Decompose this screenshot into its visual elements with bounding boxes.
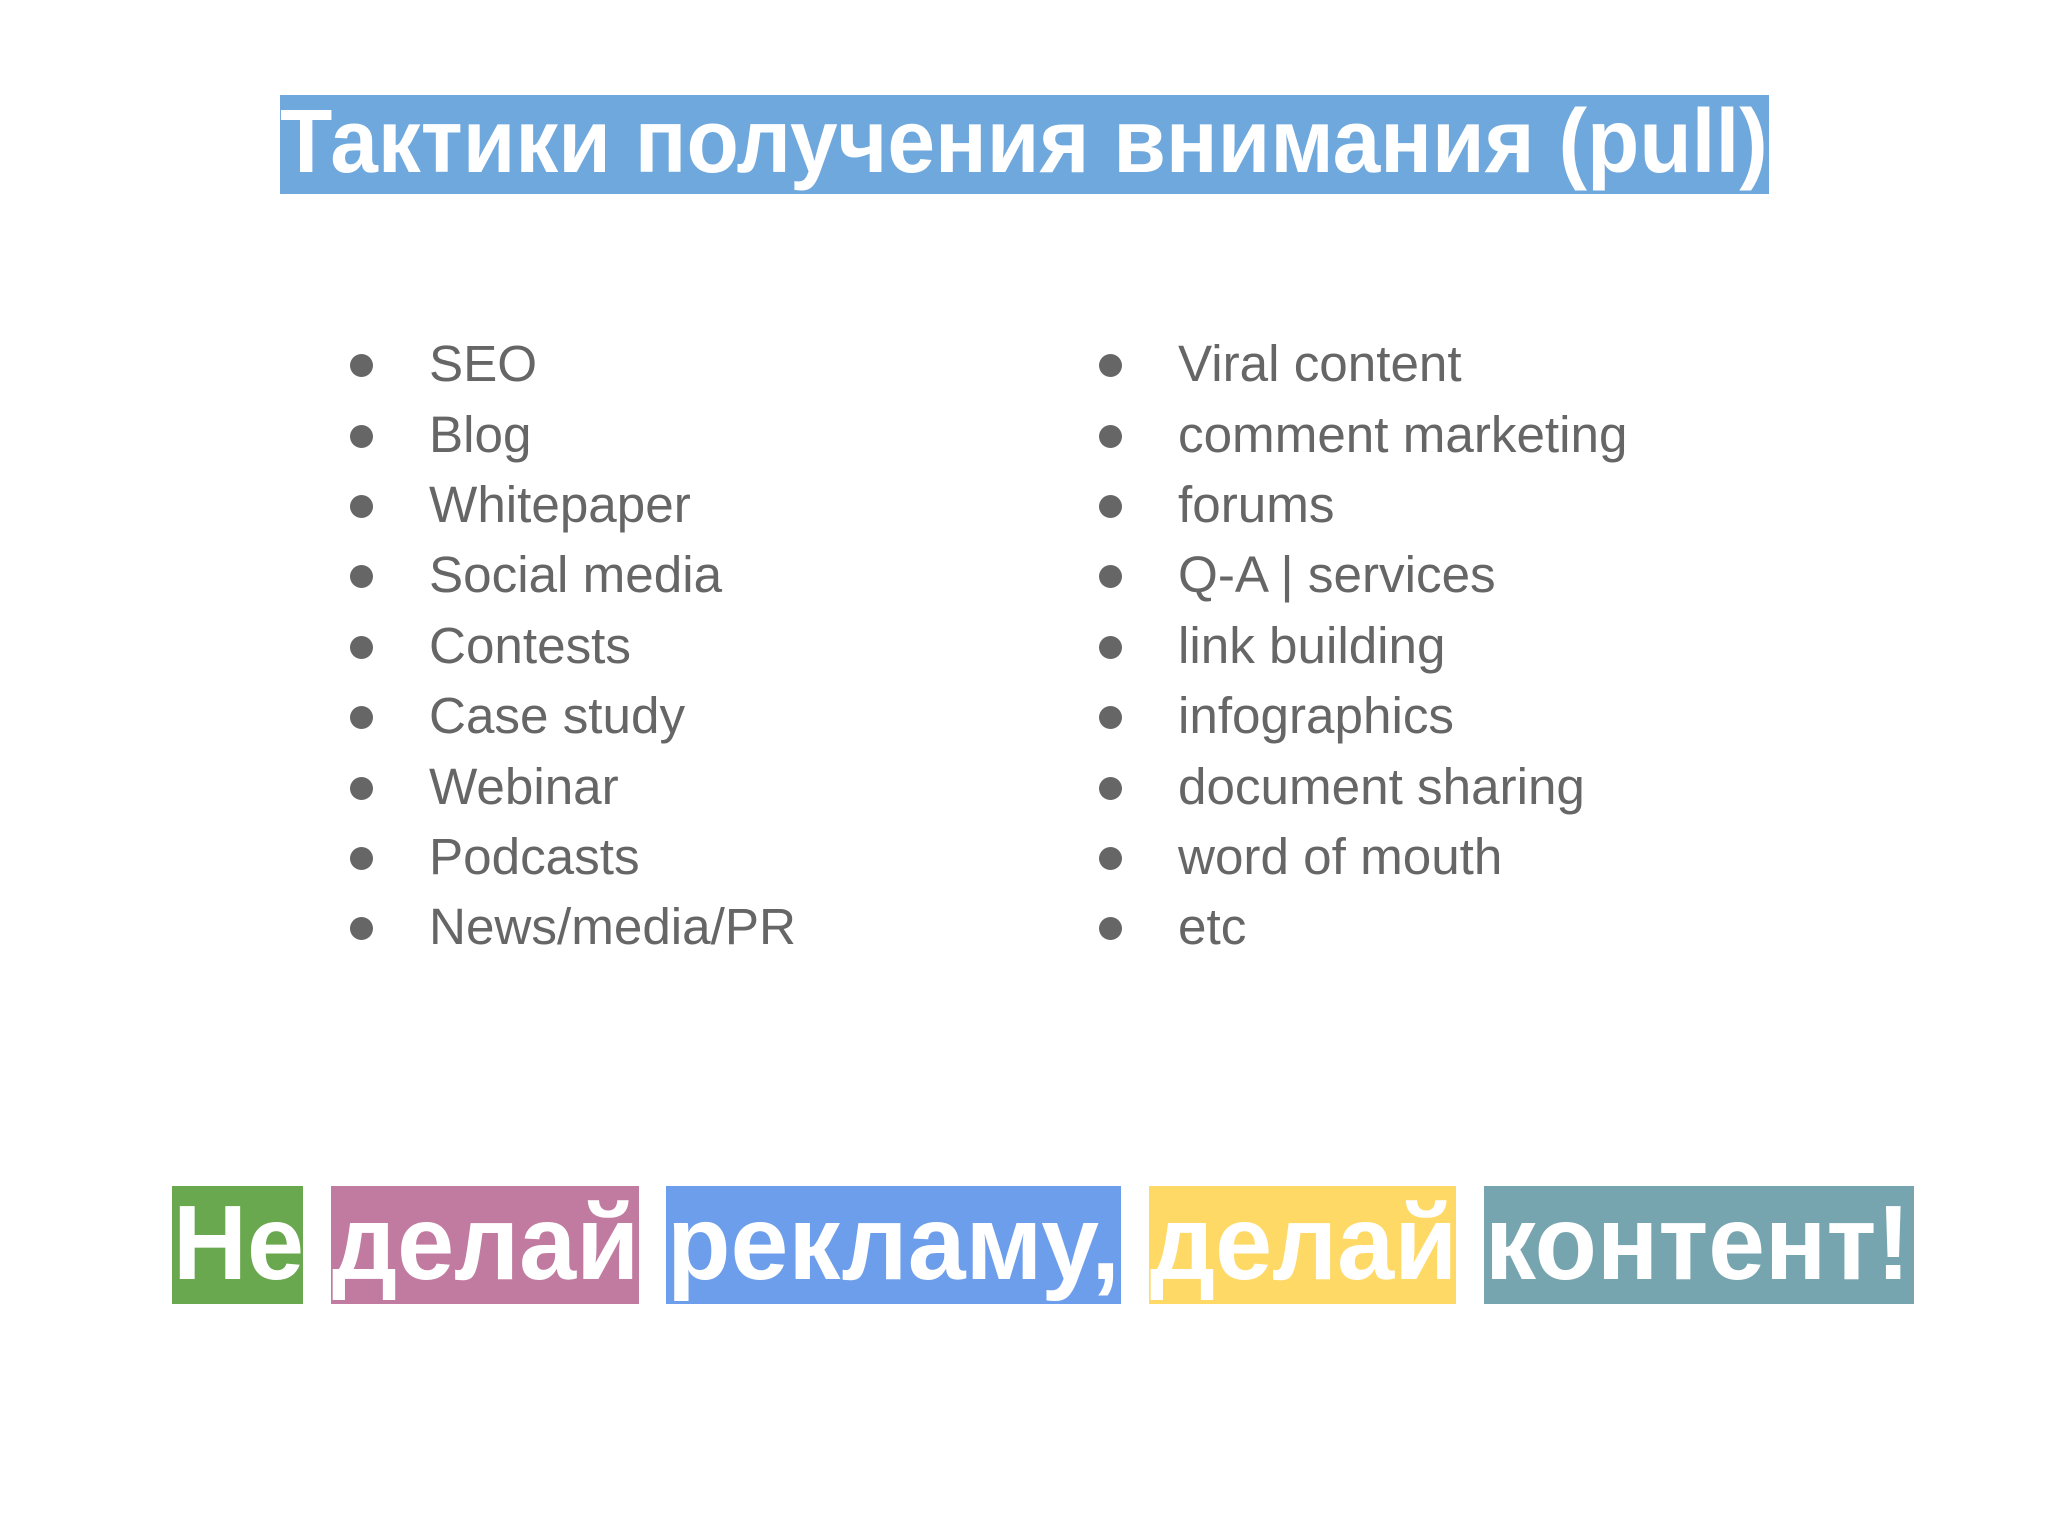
panel: right bullet list: word of mouth bbox=[1178, 828, 1502, 885]
panel: right bullet list: Q-A | services bbox=[1178, 546, 1496, 603]
panel: left bullet list bbox=[350, 335, 796, 955]
panel: left bullet list: Podcasts bbox=[429, 828, 640, 885]
panel: right bullet list: etc bbox=[1178, 898, 1246, 955]
panel: left bullet list: Case study bbox=[429, 687, 685, 744]
panel: left bullet list: Whitepaper bbox=[429, 476, 691, 533]
panel: right bullet list: link building bbox=[1178, 617, 1446, 674]
panel: left bullet list: Contests bbox=[429, 617, 631, 674]
panel: left bullet list: Social media bbox=[429, 546, 722, 603]
slogan word: рекламу: рекламу, bbox=[667, 1184, 1120, 1302]
panel: right bullet list: comment marketing bbox=[1178, 406, 1627, 463]
panel: right bullet list: infographics bbox=[1178, 687, 1454, 744]
panel: right bullet list: forums bbox=[1178, 476, 1334, 533]
slogan word: контент: контент! bbox=[1485, 1184, 1910, 1302]
panel: right bullet list bbox=[1099, 335, 1627, 955]
slogan word: делай (pink): делай bbox=[332, 1184, 639, 1302]
panel: right bullet list: document sharing bbox=[1178, 758, 1585, 815]
panel: left bullet list: News/media/PR bbox=[429, 898, 796, 955]
slogan word: делай (yellow): делай bbox=[1150, 1184, 1457, 1302]
panel: left bullet list: Webinar bbox=[429, 758, 619, 815]
title: Тактики получения внимания (pull) bbox=[280, 92, 1768, 192]
panel: left bullet list: Blog bbox=[429, 406, 531, 463]
panel: left bullet list: SEO bbox=[429, 335, 537, 392]
slogan word: Не: Не bbox=[173, 1184, 304, 1302]
panel: right bullet list: Viral content bbox=[1178, 335, 1462, 392]
